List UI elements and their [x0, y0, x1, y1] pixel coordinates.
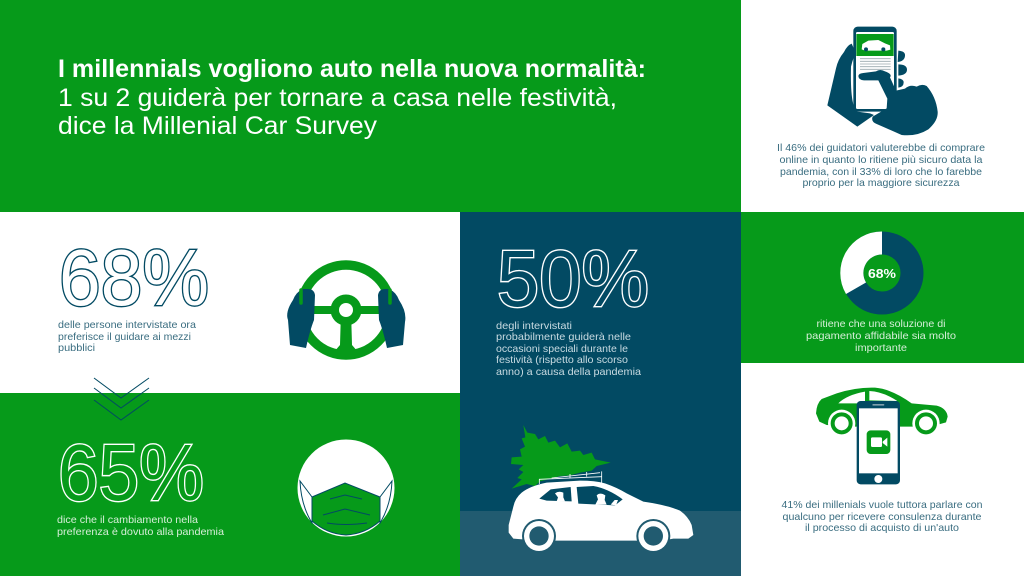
title [58, 55, 646, 140]
icon: steering wheel with hands [287, 265, 405, 355]
text: 68% caption: preferisce il guidare ai mezzi [58, 331, 191, 343]
title: 1 su 2 guiderà per tornare a casa nelle festività, [58, 84, 617, 112]
text: 68% caption: delle persone intervistate ora [58, 319, 196, 331]
icon: car and phone with video call [816, 388, 948, 484]
text: 50% caption [496, 320, 641, 378]
text: payment caption [806, 318, 956, 354]
text: 65% caption: preferenza è dovuto alla pandemia [57, 526, 224, 538]
text: payment caption: importante [855, 342, 907, 354]
text: 50% caption: occasioni speciali durante le [496, 343, 628, 355]
text: 68% caption [58, 319, 196, 354]
text: online purchase: online in quanto lo ritiene più sicuro data la [780, 154, 983, 166]
panel: title background [0, 0, 741, 212]
icon: car with Christmas tree [509, 425, 693, 553]
road band [460, 511, 741, 576]
arrow: chevrons [94, 378, 149, 420]
text: 50% caption: degli intervistati [496, 320, 572, 332]
title: I millennials vogliono auto nella nuova normalità: [58, 55, 646, 83]
text: video consultation caption: 41% dei millenials vuole tuttora parlare con [782, 499, 983, 511]
icon: hand holding phone [827, 27, 938, 135]
text: video consultation caption: il processo di acquisto di un'auto [805, 522, 959, 534]
text: 50% caption: anno) a causa della pandemia [496, 366, 641, 378]
chart: donut 68%: 68% [868, 266, 896, 281]
text: 50% caption: probabilmente guiderà nelle [496, 331, 631, 343]
panel: video consultation [741, 363, 1024, 576]
text: 50% caption: festività (rispetto allo scorso [496, 354, 628, 366]
stat: 65%: 65% [58, 428, 204, 517]
text: online purchase: pandemia, con il 33% di loro che lo farebbe [780, 166, 982, 178]
chart: donut 68% [840, 231, 912, 303]
text: online purchase: Il 46% dei guidatori valuterebbe di comprare [777, 142, 985, 154]
text: online purchase [777, 142, 985, 189]
text: video consultation caption: qualcuno per ricevere consulenza durante [782, 511, 982, 523]
stat: 68%: 68% [59, 233, 209, 322]
text: video consultation caption [782, 499, 983, 534]
title: dice la Millenial Car Survey [58, 112, 378, 140]
text: 65% caption [57, 514, 224, 538]
panel: payment [741, 212, 1024, 363]
stat: 50%: 50% [497, 234, 649, 323]
text: payment caption: pagamento affidabile sia molto [806, 330, 956, 342]
panel: online purchase [741, 0, 1024, 212]
icon: face mask [298, 440, 394, 536]
panel: 65 percent pandemic [0, 393, 460, 576]
panel: 50 percent holidays [460, 212, 741, 576]
text: payment caption: ritiene che una soluzione di [816, 318, 946, 330]
text: 65% caption: dice che il cambiamento nella [57, 514, 198, 526]
text: online purchase: proprio per la maggiore sicurezza [802, 177, 960, 189]
text: 68% caption: pubblici [58, 342, 95, 354]
panel: 68 percent driving [0, 212, 460, 393]
